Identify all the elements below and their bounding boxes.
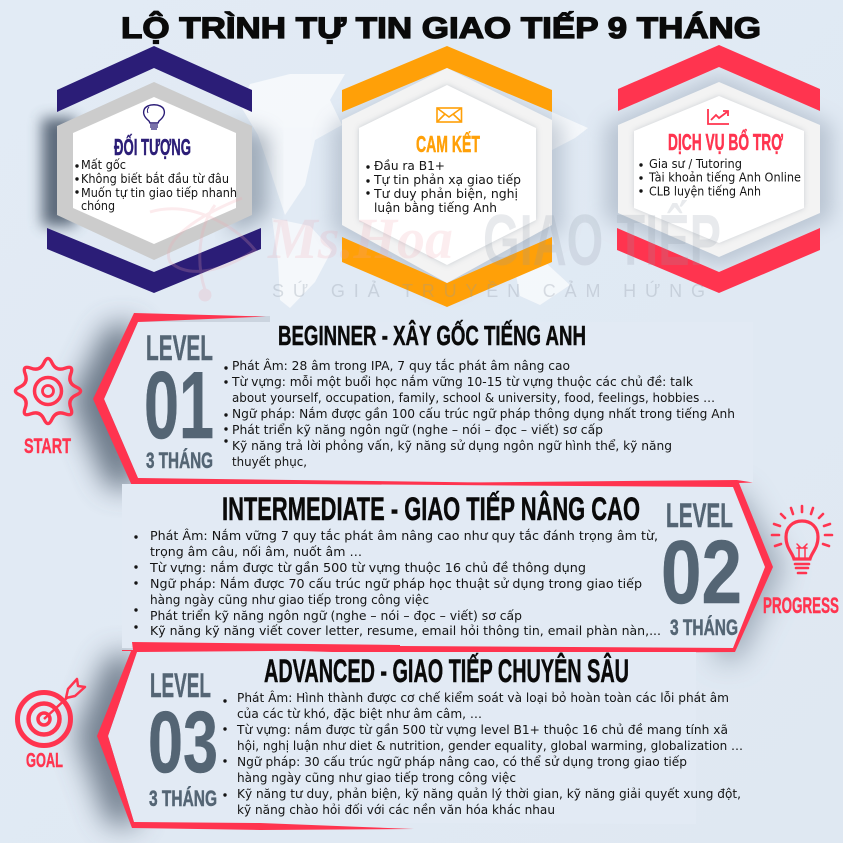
commitment list (366, 158, 521, 215)
level 02 heading: INTERMEDIATE - GIAO TIẾP NÂNG CAO (222, 491, 640, 527)
white hexagon (634, 96, 804, 243)
audience list: chóng (81, 198, 115, 213)
purple bottom chevron (47, 228, 261, 293)
level 01 background (104, 322, 753, 483)
level 01 content: about yourself, occupation, family, school & university, food, feelings, hobbies … (232, 390, 715, 405)
level 02 red frame (130, 480, 773, 654)
watermark: SỨ GIẢ TRUYỀN CẢM HỨNG (272, 280, 705, 301)
label: goal: GOAL (26, 750, 63, 772)
level 02 content (134, 528, 661, 638)
commitment list: luận bằng tiếng Anh (374, 200, 497, 215)
icon: envelope (437, 108, 462, 122)
icon: progress bulb (772, 506, 832, 573)
level 03 content: Ngữ pháp: 30 cấu trúc ngữ pháp nâng cao, có thể sử dụng trong giao tiếp (237, 754, 687, 769)
panel: level 02 (122, 480, 773, 654)
level 01 content: Từ vựng: mỗi một buổi học nắm vững 10-15 từ vựng thuộc các chủ đề: talk (231, 374, 694, 389)
level 01 badge (144, 329, 214, 473)
services list (639, 156, 801, 198)
level 03 content: hội, nghị luận như diet & nutrition, gender equality, global warming, globalization … (237, 738, 743, 753)
commitment list: Tư duy phản biện, nghị (373, 186, 518, 201)
level 03 content (223, 690, 743, 817)
white hexagon (73, 97, 236, 244)
level 02 badge: 3 THÁNG (670, 615, 738, 640)
level 03 content: Phát Âm: Hình thành được cơ chế kiểm soát và loại bỏ hoàn toàn các lỗi phát âm (237, 690, 729, 705)
level 01 red frame (93, 313, 600, 488)
watermark: Ms.Hoa (267, 206, 453, 271)
world map backdrop (240, 74, 588, 308)
audience list: Muốn tự tin giao tiếp nhanh (81, 185, 237, 200)
level 03 badge: 3 THÁNG (149, 786, 217, 811)
icon: light bulb (144, 105, 164, 129)
level 02 content: hàng ngày cũng như giao tiếp trong công việc (150, 592, 429, 607)
heading: CAM KẾT (416, 130, 480, 157)
icon: goal target (18, 679, 85, 746)
outer white hexagon (618, 82, 820, 257)
panel: level 01 (93, 313, 753, 488)
services list: Tài khoản tiếng Anh Online (648, 170, 801, 184)
level 01 content: Phát triển kỹ năng ngôn ngữ (nghe – nói – đọc – viết) sơ cấp (232, 422, 603, 437)
orange top chevron (342, 46, 552, 112)
level 03 content: Kỹ năng tư duy, phản biện, kỹ năng quản lý thời gian, kỹ năng giải quyết xung đột, (237, 786, 741, 801)
level 03 content: kỹ năng chào hỏi đối với các nền văn hóa khác nhau (237, 802, 555, 817)
level 03 content: của các từ khó, đặc biệt như âm câm, … (237, 706, 482, 721)
panel: level 03 (97, 642, 743, 830)
orange bottom chevron (342, 237, 552, 307)
red top chevron (618, 45, 820, 111)
panel shadows (70, 316, 785, 825)
level 02 content: Kỹ năng kỹ năng viết cover letter, resume, email hỏi thông tin, email phàn nàn,... (150, 623, 661, 638)
watermark: GIAO TIẾP (483, 200, 721, 281)
audience list (75, 157, 237, 213)
panel: cam kết (332, 46, 562, 307)
level 01 badge: LEVEL (146, 329, 213, 368)
level 03 background (108, 652, 696, 824)
level 03 content: Từ vựng: nắm được từ gần 500 từ vựng level B1+ thuộc 16 chủ đề mang tính xã (236, 722, 728, 737)
icon: start gear (15, 358, 81, 424)
outer white hexagon (342, 68, 552, 283)
level 01 content: thuyết phục, (232, 454, 307, 469)
grey hexagon (57, 82, 252, 260)
red bottom chevron (617, 228, 820, 293)
level 03 badge: LEVEL (150, 667, 211, 705)
level 01 content: Phát Âm: 28 âm trong IPA, 7 quy tắc phát âm nâng cao (232, 358, 570, 373)
level 01 content (224, 358, 735, 469)
level 03 badge (148, 667, 218, 811)
level 02 content: Phát Âm: Nắm vững 7 quy tắc phát âm nâng cao như quy tắc đánh trọng âm từ, (150, 528, 658, 543)
services list: Gia sư / Tutoring (649, 156, 742, 171)
level 03 red frame (97, 642, 414, 830)
heading: ĐỐI TƯỢNG (114, 133, 191, 160)
label: start: START (24, 435, 71, 458)
audience list: Mất gốc (81, 157, 126, 172)
commitment list: Đầu ra B1+ (374, 158, 445, 173)
level 03 content: hàng ngày cũng như giao tiếp trong công việc (237, 770, 516, 785)
white hexagon (359, 85, 536, 265)
level 03 badge: 03 (148, 694, 218, 791)
level 01 badge: 01 (144, 352, 214, 459)
panel: dịch vụ bổ trợ (605, 45, 832, 293)
level 03 heading: ADVANCED - GIAO TIẾP CHUYÊN SÂU (264, 653, 629, 689)
services list: CLB luyện tiếng Anh (649, 184, 761, 198)
audience list: Không biết bắt đầu từ đâu (81, 171, 229, 186)
purple top chevron (57, 46, 252, 112)
commitment list: Tự tin phản xạ giao tiếp (373, 172, 521, 187)
level 02 background (122, 484, 768, 648)
level 02 badge: 02 (661, 523, 742, 623)
level 01 badge: 3 THÁNG (146, 448, 213, 473)
level 02 content: trọng âm câu, nối âm, nuốt âm … (150, 544, 362, 559)
level 02 content: Từ vựng: nắm được từ gần 500 từ vựng thuộc 16 chủ đề thông dụng (149, 560, 586, 575)
level 01 content: Ngữ pháp: Nắm được gần 100 cấu trúc ngữ pháp thông dụng nhất trong tiếng Anh (232, 406, 735, 421)
panel: đối tượng (42, 46, 268, 293)
level 02 content: Phát triển kỹ năng ngôn ngữ (nghe – nói – đọc – viết) sơ cấp (150, 608, 522, 623)
title: LỘ TRÌNH TỰ TIN GIAO TIẾP 9 THÁNG (121, 11, 761, 45)
level 02 badge: LEVEL (666, 497, 733, 535)
level 02 content: Ngữ pháp: Nắm được 70 cấu trúc ngữ pháp học thuật sử dụng trong giao tiếp (150, 576, 642, 591)
level 02 badge (661, 497, 742, 640)
watermark (150, 198, 721, 301)
level 01 heading: BEGINNER - XÂY GỐC TIẾNG ANH (278, 319, 586, 351)
level 01 content: Kỹ năng trả lời phỏng vấn, kỹ năng sử dụng ngôn ngữ hình thể, kỹ năng (232, 438, 672, 453)
icon: growth chart (708, 109, 729, 124)
